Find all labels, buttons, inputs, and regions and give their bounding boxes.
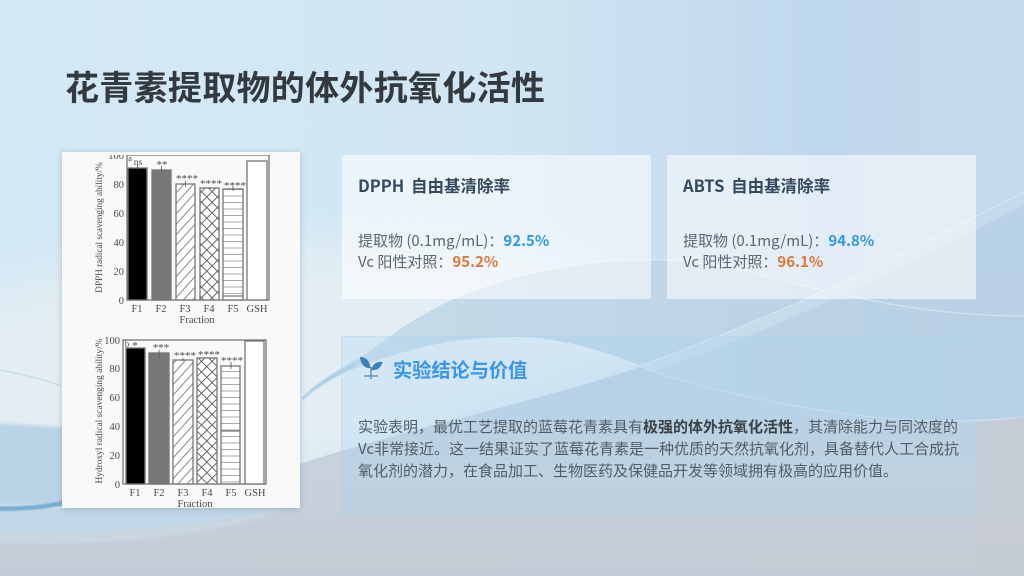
chart b: hydroxyl: F2 <box>153 488 165 499</box>
text: DPPH values <box>358 230 549 272</box>
heading: ABTS: ABTS 自由基清除率 <box>683 173 830 197</box>
chart a: DPPH: GSH <box>246 304 268 315</box>
chart a: DPPH: F5 <box>227 304 239 315</box>
chart b: hydroxyl: 40 <box>110 422 120 433</box>
chart b: hydroxyl: 60 <box>110 393 120 404</box>
chart a: DPPH: F4 <box>203 304 215 315</box>
chart b: hydroxyl: 0 <box>115 480 120 491</box>
lower-left ribbon <box>0 505 300 533</box>
text: conclusion body: Vc非常接近。这一结果证实了蓝莓花青素是一种优质的天然抗氧化剂，具备替代人工合成抗 <box>358 438 959 459</box>
chart a: DPPH: 80 <box>114 180 124 191</box>
chart b: hydroxyl: 20 <box>110 451 120 462</box>
blue wave band <box>302 260 1024 421</box>
chart b: hydroxyl: b <box>125 339 130 349</box>
text: conclusion body: 氧化剂的潜力，在食品加工、生物医药及保健品开发等领域拥有极高的应用价值。 <box>358 460 898 481</box>
chart a: DPPH: DPPH radical scavenging ability/% <box>94 162 104 293</box>
text: ABTS values: 提取物 (0.1mg/mL)：94.8% <box>683 230 874 251</box>
chart a: DPPH: 60 <box>114 209 124 220</box>
grey-blue area below rising ribbon <box>0 182 1024 576</box>
blue lower-left line <box>0 499 70 511</box>
icon: seedling <box>360 357 382 379</box>
chart b: hydroxyl: **** <box>198 349 220 361</box>
chart a: DPPH: 20 <box>114 267 124 278</box>
panel: bar chart figure <box>62 152 300 508</box>
chart a: DPPH: 40 <box>114 238 124 249</box>
chart b: hydroxyl: F3 <box>177 488 189 499</box>
text: conclusion body: 实验表明，最优工艺提取的蓝莓花青素具有极强的体外抗氧化活性，其清除能力与同浓度的 <box>358 416 958 437</box>
left band <box>0 423 300 505</box>
chart a: DPPH: F3 <box>179 304 191 315</box>
chart b: hydroxyl: 80 <box>110 364 120 375</box>
chart b: hydroxyl: F5 <box>225 488 237 499</box>
title: 花青素提取物的体外抗氧化活性 <box>65 61 545 110</box>
heading: conclusion: 实验结论与价值 <box>393 355 527 383</box>
chart a: DPPH: **** <box>176 173 198 185</box>
chart b: hydroxyl <box>95 336 266 510</box>
chart a: DPPH: a <box>128 154 132 163</box>
chart b: hydroxyl: **** <box>174 350 196 362</box>
chart a: DPPH: **** <box>200 178 222 190</box>
chart b: hydroxyl: F4 <box>201 488 213 499</box>
chart b: hydroxyl: 100 <box>104 336 120 347</box>
heading: DPPH: DPPH 自由基清除率 <box>358 173 510 197</box>
chart b: hydroxyl: Hydroxyl radical scavenging ability/% <box>95 338 105 484</box>
pale body <box>0 242 760 520</box>
rising ribbon <box>643 192 1024 372</box>
panel: DPPH card <box>342 155 651 299</box>
text: ABTS values: Vc 阳性对照：96.1% <box>683 251 823 272</box>
chart a: DPPH: 0 <box>119 296 124 307</box>
text: DPPH values: Vc 阳性对照：95.2% <box>358 251 498 272</box>
chart a: DPPH: **** <box>224 180 246 192</box>
chart b: hydroxyl: F1 <box>129 488 141 499</box>
text: ABTS values <box>683 230 874 272</box>
chart b: hydroxyl: **** <box>221 355 243 367</box>
panel: conclusion <box>341 336 977 514</box>
chart a: DPPH <box>94 151 269 326</box>
panel: ABTS card <box>667 155 976 299</box>
text: conclusion body <box>358 416 959 481</box>
grey right of conclusion <box>977 417 1024 576</box>
chart b: hydroxyl: GSH <box>244 488 266 499</box>
chart a: DPPH: ** <box>156 159 168 171</box>
chart a: DPPH: Fraction <box>180 315 215 326</box>
text: DPPH values: 提取物 (0.1mg/mL)：92.5% <box>358 230 549 251</box>
chart b: hydroxyl: * <box>132 340 138 352</box>
chart a: DPPH: F1 <box>131 304 143 315</box>
chart b: hydroxyl: *** <box>153 342 169 354</box>
chart a: DPPH: ns <box>134 158 143 168</box>
chart a: DPPH: F2 <box>155 304 167 315</box>
